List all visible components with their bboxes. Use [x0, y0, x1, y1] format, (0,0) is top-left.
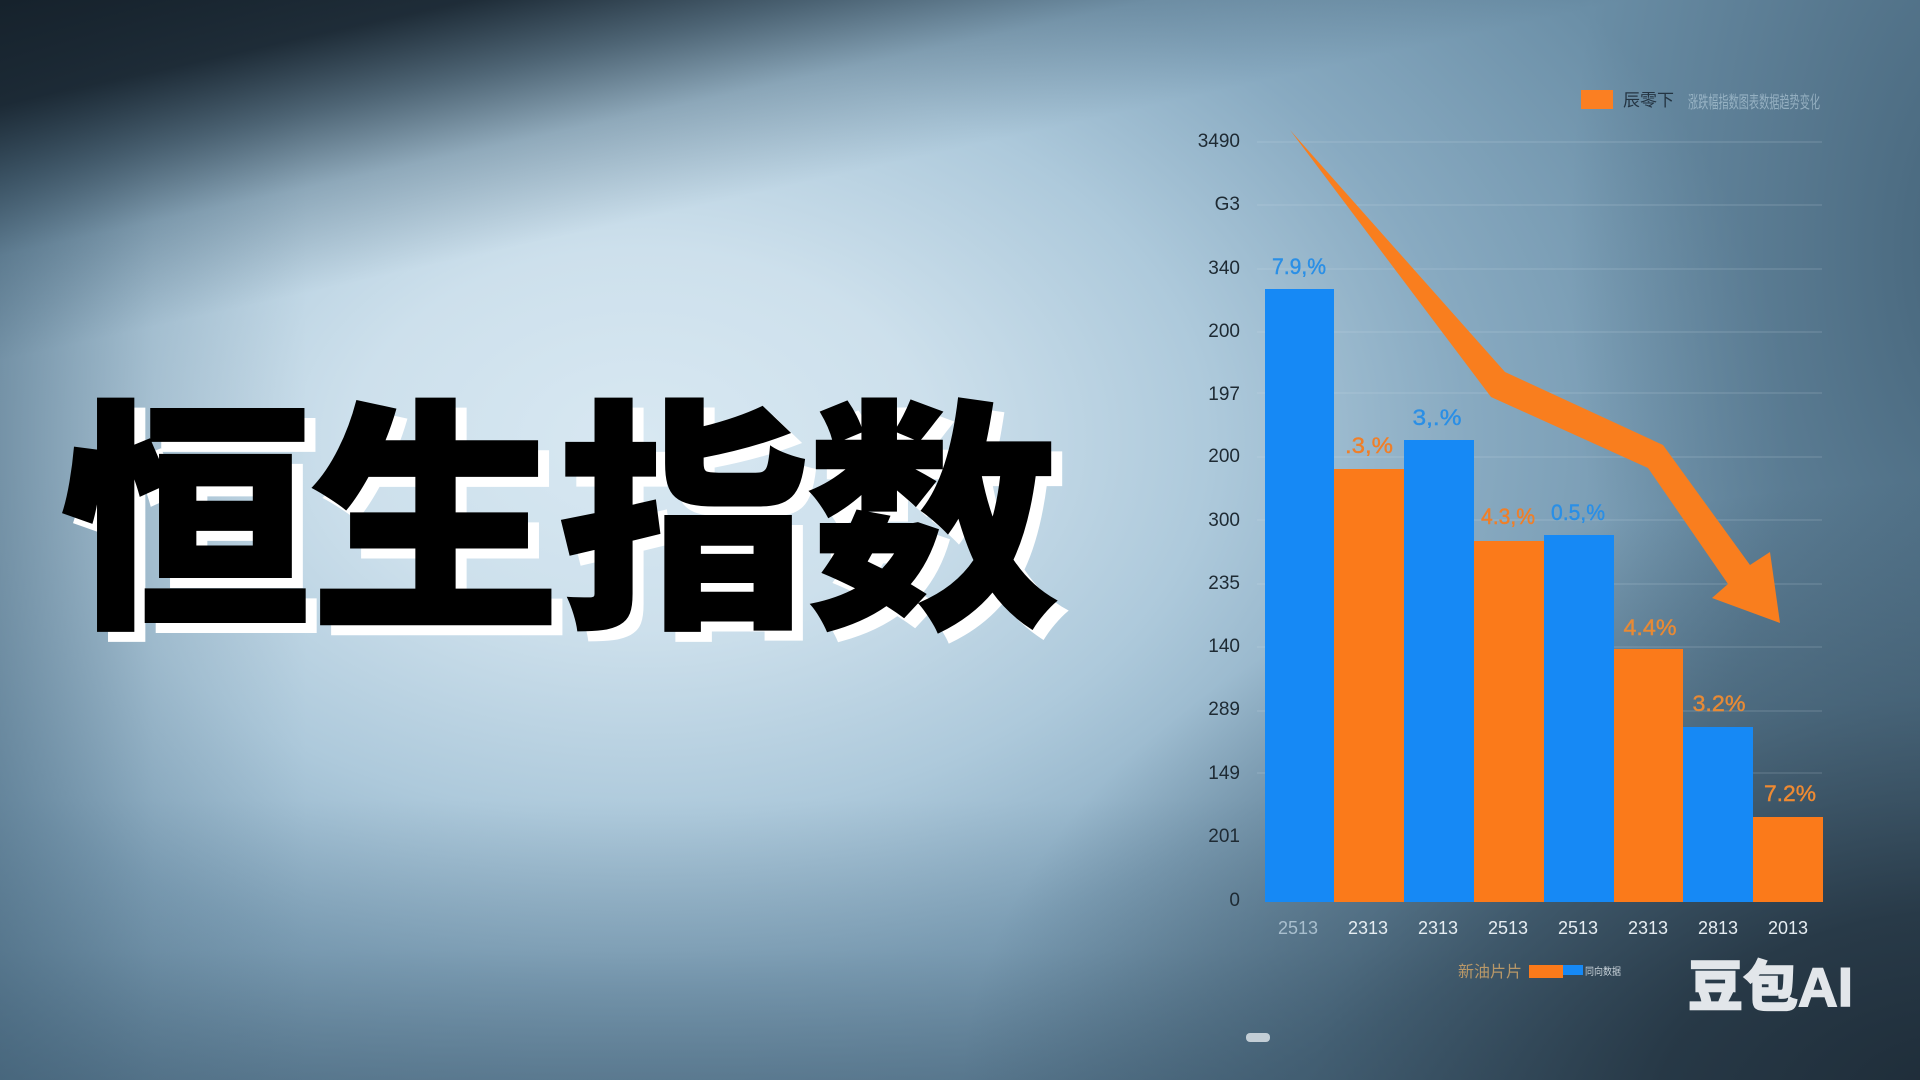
- arrow: downward trend: [1290, 130, 1780, 623]
- y axis labels: 140: [1208, 636, 1240, 657]
- top legend: 涨跌幅指数图表数据趋势变化: [1688, 93, 1820, 112]
- y axis labels: 3490: [1198, 131, 1240, 152]
- bottom legend: [1458, 963, 1621, 981]
- y axis labels: 235: [1208, 573, 1240, 594]
- x axis labels: 2313: [1628, 918, 1668, 938]
- small pill artifact: [1246, 1033, 1270, 1042]
- value labels: 4.3,%: [1481, 504, 1535, 529]
- value labels: 7.2%: [1764, 781, 1816, 806]
- value labels: [1272, 254, 1816, 806]
- title: 恒生指数: 恒生指数: [71, 397, 1067, 670]
- value labels: 3,.%: [1412, 405, 1462, 430]
- value labels: 4.4%: [1624, 615, 1676, 640]
- y axis labels: 0: [1229, 890, 1240, 911]
- top legend: 辰零下: [1623, 91, 1674, 110]
- bottom legend: 同向数据: [1585, 965, 1621, 978]
- y axis labels: 200: [1208, 446, 1240, 467]
- title: 恒生指数: 恒生指数: [60, 387, 1056, 660]
- value labels: .3,%: [1345, 433, 1393, 458]
- x axis labels: 2313: [1348, 918, 1388, 938]
- x axis labels: 2013: [1768, 918, 1808, 938]
- top legend: [1581, 90, 1820, 112]
- y axis labels: 201: [1208, 826, 1240, 847]
- x axis labels: 2513: [1558, 918, 1598, 938]
- y axis labels: 289: [1208, 699, 1240, 720]
- y axis labels: G3: [1215, 194, 1240, 215]
- watermark: 豆包AI: 豆包AI: [1688, 956, 1853, 1018]
- x axis labels: 2313: [1418, 918, 1458, 938]
- y axis labels: 149: [1208, 763, 1240, 784]
- value labels: 0.5,%: [1551, 500, 1605, 525]
- y axis labels: 197: [1208, 384, 1240, 405]
- value labels: 3.2%: [1692, 691, 1746, 716]
- value labels: 7.9,%: [1272, 254, 1326, 279]
- y axis labels: 340: [1208, 258, 1240, 279]
- x axis labels: 2513: [1278, 918, 1318, 938]
- y axis labels: 300: [1208, 510, 1240, 531]
- y axis labels: 200: [1208, 321, 1240, 342]
- x axis labels: 2513: [1488, 918, 1528, 938]
- bottom legend: 新油片片: [1458, 963, 1522, 981]
- x axis labels: [1278, 918, 1808, 938]
- y axis labels: [1198, 131, 1240, 911]
- bars: [1265, 289, 1823, 902]
- x axis labels: 2813: [1698, 918, 1738, 938]
